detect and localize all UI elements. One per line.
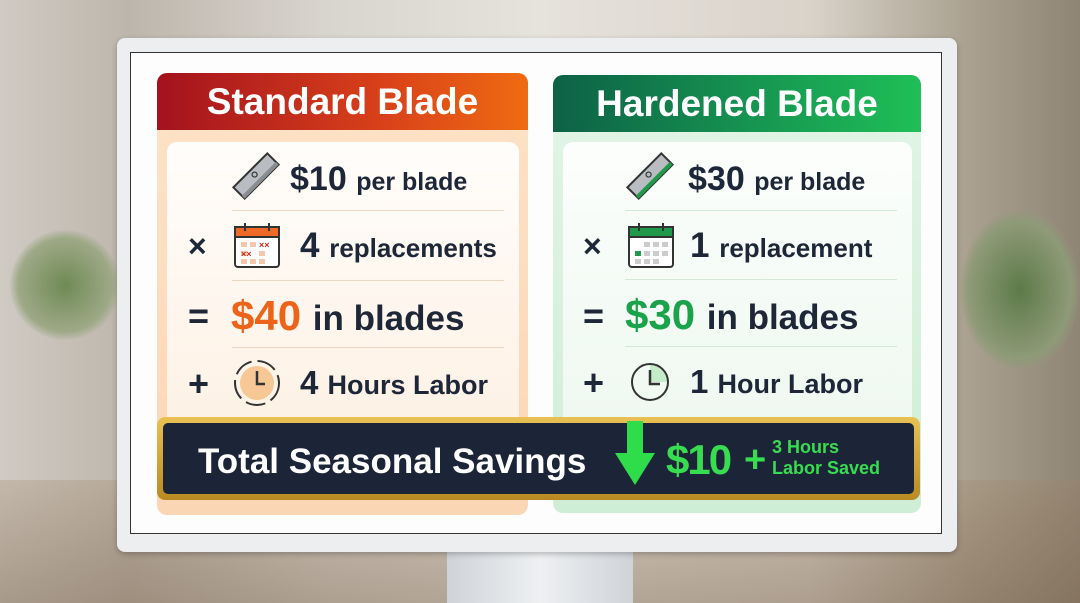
labor saved: Labor Saved xyxy=(772,458,880,478)
labor saved xyxy=(772,437,880,478)
operator =: = xyxy=(188,295,209,336)
screen xyxy=(130,52,942,534)
icon: down arrow xyxy=(615,421,655,485)
operator +: + xyxy=(188,363,209,404)
heading: Hardened Blade: Hardened Blade xyxy=(596,83,878,124)
icon: clock green xyxy=(631,363,669,401)
icon: calendar xyxy=(234,223,280,268)
heading: Hardened Blade xyxy=(553,75,921,132)
inner card xyxy=(563,142,912,432)
operator x: × xyxy=(188,228,207,264)
operator x: × xyxy=(583,228,602,264)
operator +: + xyxy=(583,362,604,403)
row: $30 per blade: $30 per blade xyxy=(688,160,865,198)
icon: calendar: ×× xyxy=(259,240,270,250)
row: 1 Hour Labor: 1 Hour Labor xyxy=(690,363,863,400)
monitor stand xyxy=(447,548,633,603)
savings label: Total Seasonal Savings xyxy=(198,442,586,481)
row: 4 Hours Labor: 4 Hours Labor xyxy=(300,364,488,401)
icon: calendar: ×× xyxy=(241,249,252,259)
icon: clock orange xyxy=(234,360,280,406)
labor saved: 3 Hours xyxy=(772,437,839,457)
icon: blade xyxy=(232,152,280,200)
panel: standard blade xyxy=(157,73,528,515)
savings amount: $10 xyxy=(666,436,730,483)
inner card xyxy=(167,142,519,432)
row: $40 in blades: $40 in blades xyxy=(231,292,464,339)
operator =: = xyxy=(583,295,604,336)
row: $30 in blades: $30 in blades xyxy=(625,291,858,338)
background plant left xyxy=(10,230,120,340)
row: 4 replacements: 4 replacements xyxy=(300,226,497,265)
background plant right xyxy=(960,210,1080,370)
row: 1 replacement: 1 replacement xyxy=(690,226,872,265)
icon: hardened blade xyxy=(626,152,674,200)
heading: Standard Blade xyxy=(157,73,528,130)
monitor xyxy=(117,38,957,552)
plus sign: + xyxy=(744,439,766,481)
heading: Standard Blade: Standard Blade xyxy=(207,81,478,122)
panel: hardened blade xyxy=(553,75,921,513)
icon: calendar green xyxy=(628,223,674,268)
row: $10 per blade: $10 per blade xyxy=(290,160,467,198)
callout: total seasonal savings xyxy=(157,417,920,500)
background floor xyxy=(0,480,1080,603)
